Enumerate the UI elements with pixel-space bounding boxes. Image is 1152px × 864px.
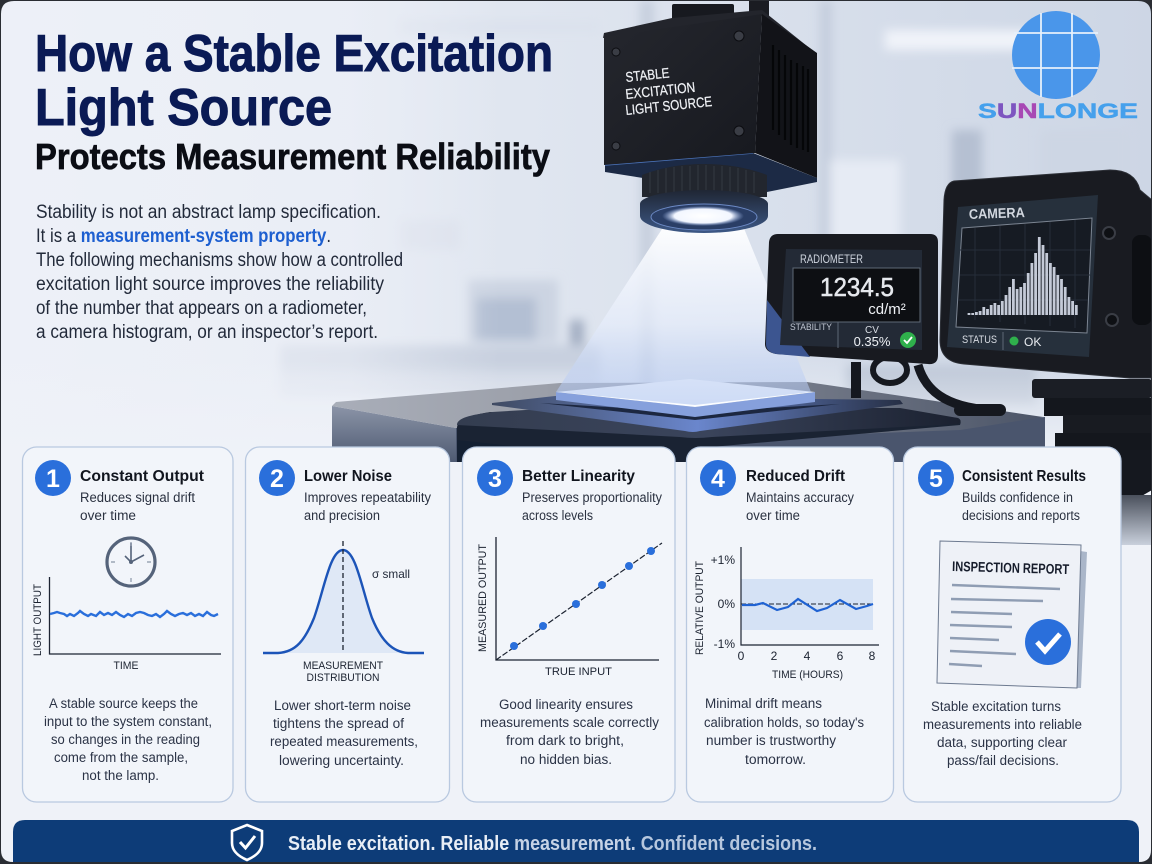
body text 1: not the lamp. [82,768,159,783]
body text 1: come from the sample, [54,750,188,765]
body text 3: no hidden bias. [520,752,612,767]
drift chart: 8 [869,649,876,663]
body text 5: Stable excitation turns [931,699,1061,714]
icon: inspection report [937,541,1087,688]
sample plate [556,379,815,417]
subheading 2: and precision [304,508,380,523]
side face [755,14,817,178]
lens glow [662,206,744,226]
drift chart: 6 [837,649,844,663]
subheading 5: Builds confidence in [962,490,1073,505]
tripod [1032,379,1152,545]
subheading 4: Maintains accuracy [746,490,854,505]
drift chart: 0% [718,597,735,611]
line chart: light output: TIME [114,660,138,672]
title line 2: Light Source [35,79,332,137]
heading 3: Better Linearity [522,468,635,485]
panel 5: consistent results [904,447,1121,802]
body text 4: calibration holds, so today's [704,715,864,730]
table side [332,406,456,462]
sample stage [457,379,961,462]
subheading 3 [522,490,662,523]
drift chart: -1% [714,637,735,651]
intro paragraph: The following mechanisms show how a controlled [36,250,403,271]
bell curve: measurement distribution: σ small [372,567,410,581]
heading 1: Constant Output [80,468,205,485]
title [35,25,553,177]
icon: clock [107,538,155,586]
badge 3: 3 [488,465,502,493]
drift chart: 2 [771,649,778,663]
label on head: LIGHT SOURCE [625,93,713,118]
intro paragraph [36,202,403,343]
body text 2 [270,698,418,768]
drift chart: 0 [738,649,745,663]
radiometer cables [856,357,1000,410]
subheading 4: over time [746,508,800,523]
badge 2: 2 [270,465,284,493]
body text 4: tomorrow. [745,752,806,767]
body text 5 [923,699,1082,768]
heading 2: Lower Noise [304,468,392,485]
subheading 5: decisions and reports [962,508,1080,523]
intro paragraph: Stability is not an abstract lamp specification. [36,202,381,223]
icon: inspection report: INSPECTION REPORT [952,558,1070,577]
vent slots [773,45,808,152]
stability label: STABILITY [790,322,833,333]
badge 4 [700,460,736,496]
scatter chart: linearity: TRUE INPUT [545,666,612,678]
intro paragraph: of the number that appears on a radiometer, [36,298,367,319]
radiometer reading box [793,268,920,322]
intro paragraph: excitation light source improves the reliability [36,274,384,295]
drift chart: RELATIVE OUTPUT [694,561,706,655]
drift chart: +1% [711,553,735,567]
CV label: CV [865,325,879,336]
panel 4: reduced drift [686,447,894,802]
body text 5: data, supporting clear [937,735,1067,750]
badge 5 [918,460,954,496]
bell curve: measurement distribution [263,541,424,684]
badge 2 [259,460,295,496]
logo [978,11,1138,123]
drift chart: TIME (HOURS) [772,669,843,681]
bell curve: measurement distribution: DISTRIBUTION [306,672,380,684]
subheading 1: Reduces signal drift [80,490,195,505]
intro paragraph: a camera histogram, or an inspector’s report. [36,322,378,343]
label on head: STABLE [625,64,670,85]
radiometer [765,234,1000,410]
banner slogan: Stable excitation. Reliable measurement. Confident decisions. [288,833,817,855]
subheading 3: across levels [522,508,593,523]
badge 1 [35,460,71,496]
subheading 2: Improves repeatability [304,490,431,505]
heading 5: Consistent Results [962,468,1086,485]
radiometer value: 1234.5 [820,272,894,302]
body text 5: measurements into reliable [923,717,1082,732]
drift chart [694,547,879,681]
radiometer label: RADIOMETER [800,254,863,266]
subheading 5 [962,490,1080,523]
body text 2: lowering uncertainty. [279,753,404,768]
badge 1: 1 [46,465,60,493]
icon: shield [232,825,262,860]
icon: green check [900,332,916,348]
top handle and cable [672,0,769,20]
camera display [940,170,1152,378]
badge 3 [477,460,513,496]
table top [332,382,1043,440]
light beam [556,226,811,405]
subheading 4 [746,490,854,523]
label on head [625,64,713,118]
histogram panel [956,218,1092,333]
panel 2: lower noise [246,447,450,802]
subheading 2 [304,490,431,523]
label on head: EXCITATION [625,79,696,102]
status OK: OK [1024,335,1041,349]
radiometer unit: cd/m² [868,301,906,318]
body text 3 [480,697,659,767]
badge 5: 5 [929,465,943,493]
body text 1: so changes in the reading [51,732,200,747]
badge 4: 4 [711,465,725,493]
status dot [1010,336,1018,346]
body text 2: tightens the spread of [273,716,404,731]
subheading 3: Preserves proportionality [522,490,662,505]
body text 4: Minimal drift means [705,696,822,711]
body text 1: A stable source keeps the [49,696,198,711]
body text 2: Lower short-term noise [274,698,411,713]
front face [604,14,762,165]
panel 1: constant output [22,447,233,802]
line chart: light output [32,577,221,672]
status label: STATUS [962,334,997,346]
logo wordmark: SUNLONGE [978,100,1138,123]
body text 4: number is trustworthy [706,733,836,748]
body text 4 [704,696,864,767]
footer banner [13,820,1139,862]
scatter chart: linearity [477,537,662,678]
CV value: 0.35% [854,334,891,349]
lab table [332,382,1045,462]
subheading 1: over time [80,508,136,523]
lens flange [640,190,768,233]
body text 2: repeated measurements, [270,734,418,749]
body text 3: measurements scale correctly [480,715,659,730]
line chart: light output: LIGHT OUTPUT [32,584,44,656]
intro paragraph: It is a measurement-system property. [36,226,331,247]
drift chart: 4 [804,649,811,663]
body text 3: from dark to bright, [506,733,624,748]
subheading 1 [80,490,195,523]
title line 1: How a Stable Excitation [35,25,553,83]
bell curve: measurement distribution: MEASUREMENT [303,660,383,672]
title line 3: Protects Measurement Reliability [35,136,550,177]
lens barrel [642,164,767,197]
panel 3: better linearity [462,447,675,802]
body text 3: Good linearity ensures [499,697,633,712]
body text 1 [44,696,212,783]
light source head [603,0,817,233]
body text 1: input to the system constant, [44,714,212,729]
heading 4: Reduced Drift [746,468,846,485]
body text 5: pass/fail decisions. [947,753,1059,768]
camera label: CAMERA [969,204,1025,222]
logo globe [1012,11,1100,99]
scatter chart: linearity: MEASURED OUTPUT [477,544,489,652]
base plate [605,153,817,192]
